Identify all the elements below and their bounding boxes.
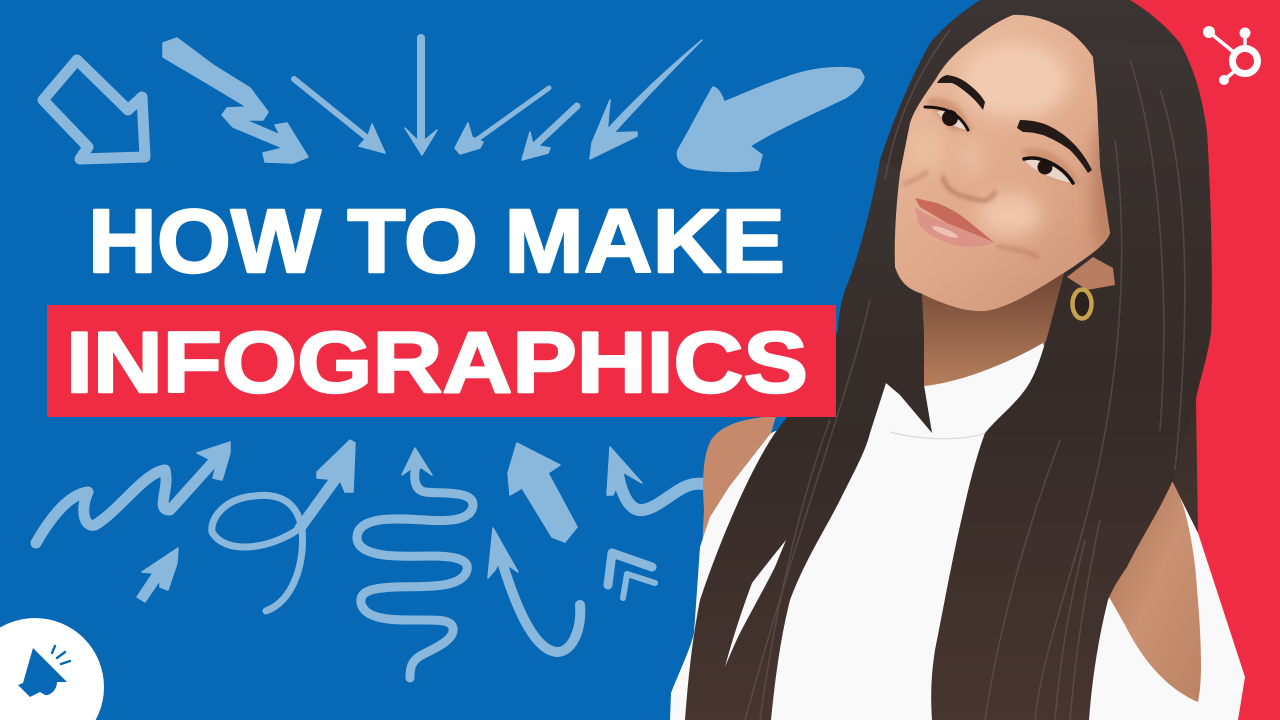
brow: right (1017, 120, 1092, 173)
smile folds (903, 171, 1038, 258)
face (895, 15, 1110, 311)
eye: left (925, 107, 968, 130)
arrow: rising zigzag (36, 442, 230, 543)
red title banner (47, 305, 836, 417)
left shoulder (702, 416, 776, 550)
eye shadow (925, 98, 1082, 186)
arrow: looped (212, 440, 355, 611)
arrow: small up-right (137, 548, 178, 602)
collar seam (890, 432, 990, 439)
arrows below the title (36, 440, 704, 678)
nose (943, 140, 995, 200)
arrow: thin diagonal (294, 79, 385, 153)
eye: right (1024, 158, 1073, 183)
arrow: straight down (405, 38, 437, 155)
hair behind the body (880, 0, 1212, 600)
right shoulder cut-out (1105, 483, 1201, 702)
arrows above the title (43, 38, 864, 171)
arrow: big brush arrow (678, 68, 864, 171)
arrow: short brush left (522, 106, 577, 160)
hair strands left (685, 160, 932, 720)
brow: left (937, 75, 985, 110)
title line: how to make: HOW TO MAKE (88, 192, 785, 292)
arrow: winding snake (357, 448, 473, 678)
earring (1072, 290, 1092, 318)
arrow: small diagonal left (455, 88, 549, 154)
lips (915, 198, 995, 247)
arrow: long fading curve (590, 40, 702, 159)
red background panel (1090, 0, 1280, 720)
arrow: brush zigzag (163, 38, 308, 163)
hair strands right (931, 40, 1212, 720)
arrow: double chevron (608, 553, 655, 598)
arrow: outlined block arrow (43, 60, 145, 159)
arrow: curved hook (488, 528, 580, 652)
icon: megaphone (18, 646, 70, 697)
arrow: thick up-left (508, 443, 577, 542)
hair highlights (745, 30, 1185, 720)
logo: hubspot sprocket (1203, 26, 1258, 85)
badge: megaphone (0, 618, 104, 720)
neck (880, 270, 1065, 392)
forehead and cheek highlights (907, 42, 1117, 260)
arrow: wavy up-left (607, 447, 704, 510)
title line: infographics: INFOGRAPHICS (66, 315, 808, 411)
ear (1067, 257, 1115, 290)
hair gap (725, 540, 786, 667)
presenter portrait (670, 0, 1245, 720)
white sleeveless top (670, 343, 1245, 720)
